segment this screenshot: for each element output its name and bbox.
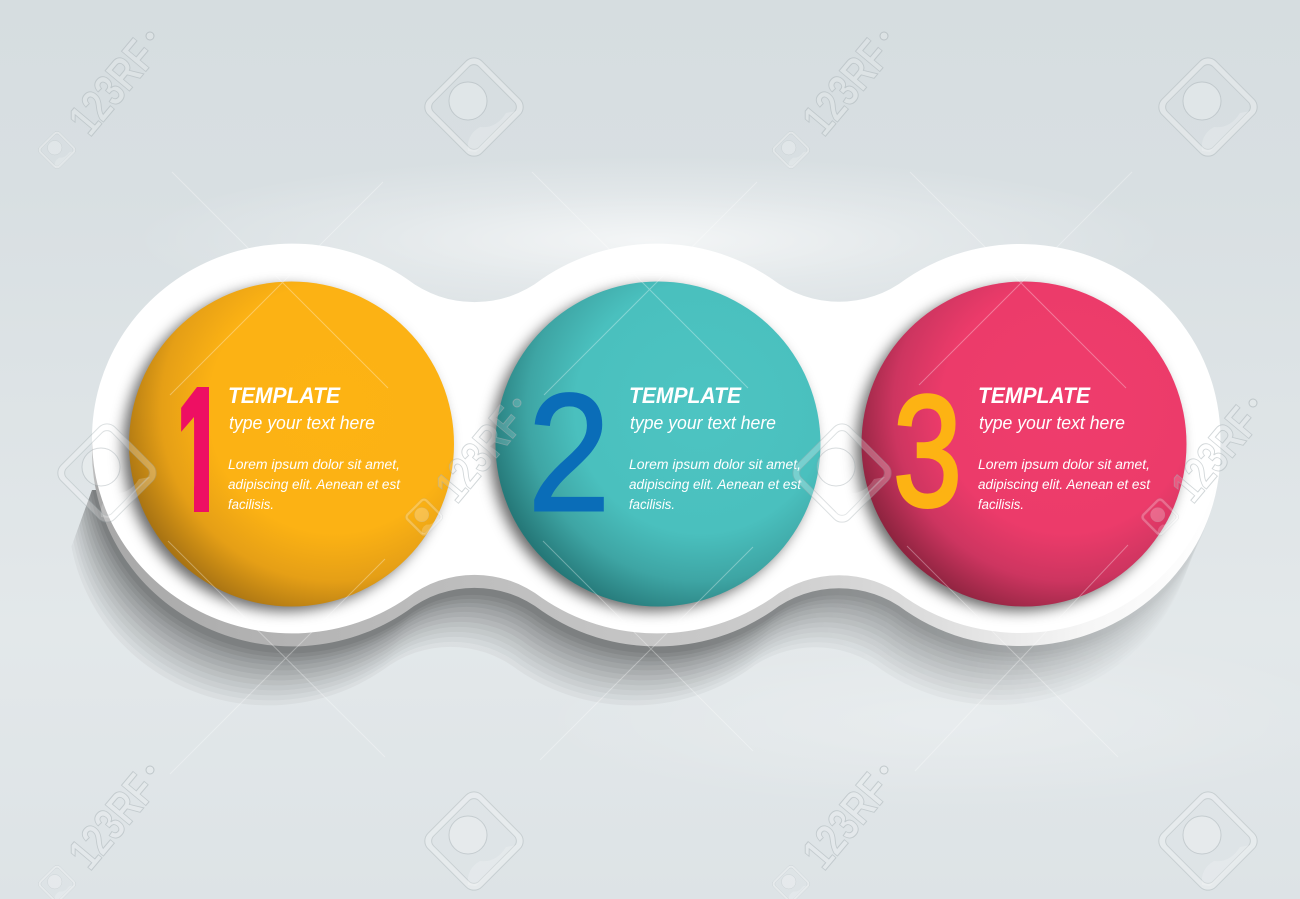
step 1 body (228, 457, 401, 512)
band lower edge (92, 257, 1220, 646)
step 3 number: 3 (893, 364, 962, 540)
step 3 subheading: type your text here (979, 413, 1125, 433)
step 1 circle (129, 282, 454, 606)
step 3 circle (862, 282, 1186, 606)
step 3 body (978, 457, 1151, 512)
step 2 body: adipiscing elit. Aenean et est (629, 477, 802, 492)
step 1 (123, 282, 454, 611)
step 1 body: adipiscing elit. Aenean et est (228, 477, 401, 492)
step 2 subheading: type your text here (630, 413, 776, 433)
step 3 heading: TEMPLATE (978, 383, 1091, 408)
step 1 body: Lorem ipsum dolor sit amet, (228, 457, 400, 472)
band drop shadow (72, 490, 1202, 705)
step 1 subheading: type your text here (229, 413, 375, 433)
step 2 body: facilisis. (629, 497, 675, 512)
step 3 body: facilisis. (978, 497, 1024, 512)
white connected band (92, 244, 1220, 633)
step 3 (856, 282, 1186, 611)
step 2 body: Lorem ipsum dolor sit amet, (629, 457, 801, 472)
step 2 body (629, 457, 802, 512)
step 2 (490, 282, 820, 611)
step 2 number: 2 (528, 358, 610, 547)
step 3 body: adipiscing elit. Aenean et est (978, 477, 1151, 492)
step 3 body: Lorem ipsum dolor sit amet, (978, 457, 1150, 472)
step 1 number: 1 (178, 356, 224, 545)
step 2 circle (496, 282, 820, 606)
step 2 heading: TEMPLATE (629, 383, 742, 408)
step 1 body: facilisis. (228, 497, 274, 512)
step 1 heading: TEMPLATE (228, 383, 341, 408)
